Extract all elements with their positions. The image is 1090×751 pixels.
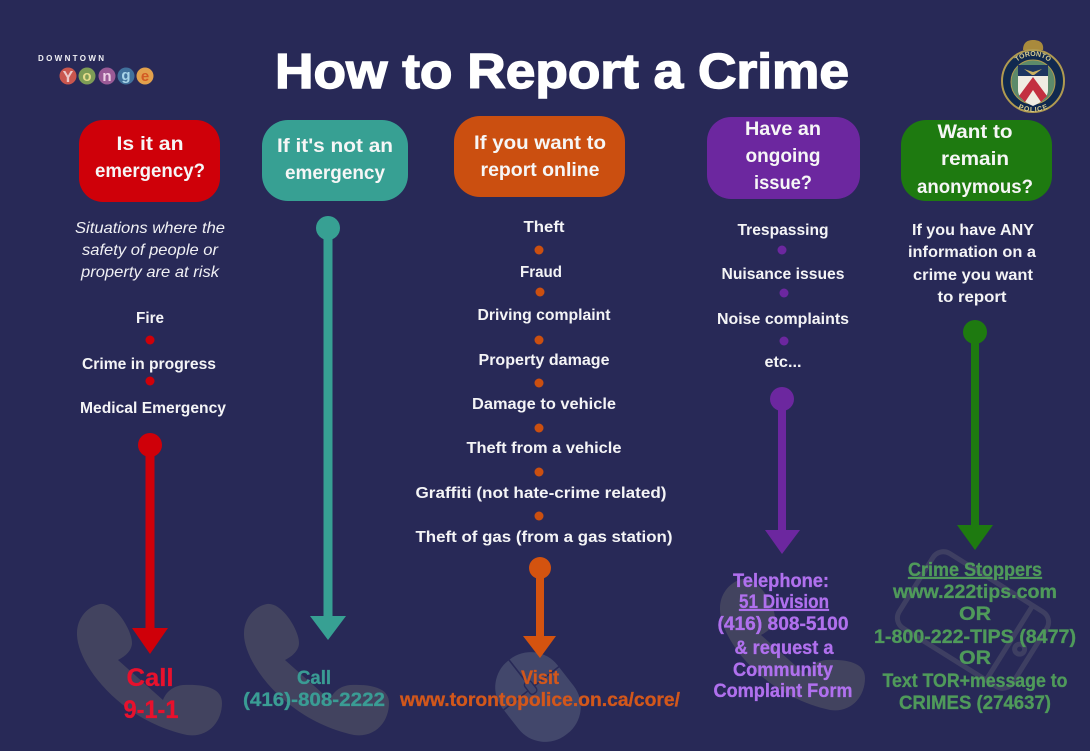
call to action: visit website: www.torontopolice.on.ca/core/ xyxy=(399,690,681,711)
heading: not an emergency xyxy=(262,120,408,201)
call to action: call 911: Call xyxy=(126,664,174,692)
heading: is it an emergency xyxy=(79,120,220,202)
call to action: crime stoppers xyxy=(874,560,1076,714)
panel: anonymous xyxy=(874,120,1076,714)
arrow: teal xyxy=(310,216,346,640)
call to action: call number: Call xyxy=(297,668,331,689)
text block: situations: property are at risk xyxy=(80,264,220,281)
panel: ongoing issue xyxy=(707,117,860,702)
text block: any information: to report xyxy=(938,289,1006,306)
arrow: green xyxy=(957,320,993,550)
call to action: crime stoppers: Crime Stoppers xyxy=(908,560,1042,581)
list: emergency examples: Crime in progress xyxy=(82,356,216,373)
heading: remain anonymous: anonymous? xyxy=(917,177,1033,198)
heading: not an emergency: If it's not an xyxy=(277,136,393,157)
call to action: crime stoppers: Text TOR+message to xyxy=(882,671,1068,692)
arrow: purple xyxy=(765,387,800,554)
heading: remain anonymous: remain xyxy=(941,149,1009,170)
list: emergency examples xyxy=(80,310,226,417)
text block: situations: Situations where the xyxy=(75,220,225,237)
list: emergency examples: Fire xyxy=(136,310,164,327)
heading: not an emergency: emergency xyxy=(285,163,385,184)
heading: report online xyxy=(454,116,625,197)
list: online report types xyxy=(416,219,672,546)
logo: Toronto Police badge xyxy=(1001,40,1065,113)
call to action: call 911: 9-1-1 xyxy=(124,696,179,724)
icon: smartphone watermark xyxy=(893,547,1053,693)
list: ongoing issue types: Noise complaints xyxy=(717,311,849,328)
text block: situations xyxy=(75,220,225,281)
icon: phone watermark left xyxy=(77,604,222,735)
panel: report online xyxy=(399,116,681,711)
call to action: telephone division: 51 Division xyxy=(739,592,829,613)
call to action: crime stoppers: OR xyxy=(959,604,991,625)
text block: any information: crime you want xyxy=(913,267,1033,284)
list: online report types: Theft from a vehicle xyxy=(466,440,622,457)
heading: report online: report online xyxy=(480,160,600,181)
heading: ongoing issue xyxy=(707,117,860,199)
icon: phone watermark second xyxy=(244,604,389,735)
title: How to Report a Crime xyxy=(275,45,849,99)
call to action: call number xyxy=(243,668,385,711)
heading: ongoing issue: issue? xyxy=(754,173,812,194)
heading: ongoing issue: ongoing xyxy=(746,146,820,167)
list: ongoing issue types: Trespassing xyxy=(738,222,828,239)
heading: is it an emergency: emergency? xyxy=(95,161,205,182)
logo: Toronto Police badge: TORONTO xyxy=(1014,51,1051,61)
text block: any information: If you have ANY xyxy=(912,222,1035,239)
call to action: crime stoppers: OR xyxy=(959,648,991,669)
call to action: call 911 xyxy=(124,664,179,724)
call to action: visit website xyxy=(399,668,681,711)
call to action: call number: (416)-808-2222 xyxy=(243,690,385,711)
list: emergency examples: Medical Emergency xyxy=(80,400,226,417)
heading: remain anonymous: Want to xyxy=(938,122,1012,143)
call to action: telephone division: Complaint Form xyxy=(714,681,852,702)
call to action: telephone division: & request a xyxy=(734,638,834,659)
text block: situations: safety of people or xyxy=(82,242,219,259)
list: ongoing issue types: etc... xyxy=(764,354,802,371)
call to action: telephone division: Community xyxy=(733,660,833,681)
logo: Downtown Yonge: n xyxy=(102,68,112,85)
list: online report types: Driving complaint xyxy=(478,307,610,324)
heading: remain anonymous xyxy=(901,120,1052,201)
arrow: orange xyxy=(523,557,556,658)
call to action: crime stoppers: www.222tips.com xyxy=(892,582,1057,603)
panel: emergency xyxy=(75,120,226,724)
list: online report types: Fraud xyxy=(520,264,562,281)
logo: Downtown Yonge: e xyxy=(141,68,149,85)
text block: any information: information on a xyxy=(908,244,1036,261)
list: online report types: Damage to vehicle xyxy=(472,396,616,413)
logo: Downtown Yonge: Y xyxy=(63,69,74,86)
panel: non emergency xyxy=(243,120,408,711)
text block: any information xyxy=(908,222,1036,306)
arrow: red xyxy=(132,433,168,654)
logo: Downtown Yonge: DOWNTOWN xyxy=(38,54,104,63)
list: ongoing issue types: Nuisance issues xyxy=(722,266,844,283)
icon: phone watermark fourth xyxy=(720,579,865,710)
logo: Downtown Yonge: g xyxy=(121,67,131,84)
call to action: telephone division: Telephone: xyxy=(733,571,829,592)
icon: computer mouse watermark xyxy=(481,638,595,751)
call to action: crime stoppers: CRIMES (274637) xyxy=(899,693,1051,714)
list: online report types: Theft of gas (from a gas station) xyxy=(416,529,672,546)
list: online report types: Theft xyxy=(524,219,564,236)
logo: Downtown Yonge xyxy=(38,54,154,86)
call to action: visit website: Visit xyxy=(521,668,560,689)
heading: report online: If you want to xyxy=(474,133,606,154)
call to action: crime stoppers: 1-800-222-TIPS (8477) xyxy=(874,627,1076,648)
list: online report types: Property damage xyxy=(478,352,610,369)
call to action: telephone division xyxy=(714,571,852,702)
heading: ongoing issue: Have an xyxy=(745,119,821,140)
logo: Downtown Yonge: o xyxy=(82,68,92,85)
heading: is it an emergency: Is it an xyxy=(116,134,184,155)
call to action: telephone division: (416) 808-5100 xyxy=(718,614,848,635)
list: ongoing issue types xyxy=(717,222,849,371)
logo: Toronto Police badge: POLICE xyxy=(1018,104,1048,112)
list: online report types: Graffiti (not hate-crime related) xyxy=(416,485,666,502)
